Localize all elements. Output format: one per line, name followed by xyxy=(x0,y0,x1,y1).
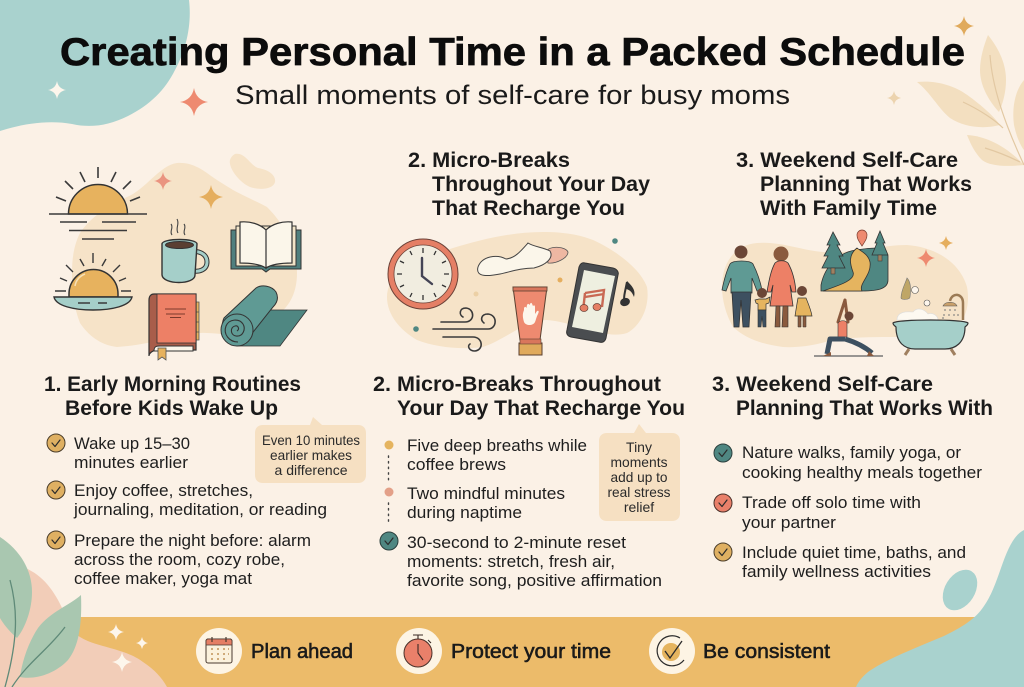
icon: sun over horizon xyxy=(49,167,147,239)
callout: tiny moments: add up to xyxy=(610,469,668,485)
heading: column 3 upper: With Family Time xyxy=(760,197,937,220)
bullet item 1 xyxy=(714,443,982,482)
illustration: morning routines xyxy=(49,154,307,360)
peach blob bottom left xyxy=(0,560,167,687)
bullet item 2: your partner xyxy=(742,513,836,532)
subtitle: Small moments of self-care for busy moms xyxy=(235,80,790,110)
icon: phone with music xyxy=(567,263,618,342)
illustration: micro-breaks xyxy=(387,232,648,355)
heading: column 3: Planning That Works With xyxy=(736,397,993,420)
callout: even 10 minutes: earlier makes xyxy=(270,447,352,463)
icon: yoga figure xyxy=(814,300,883,356)
heading: column 2 upper: 2. Micro-Breaks xyxy=(408,149,570,172)
leaves top right xyxy=(917,35,1024,166)
icon: music note xyxy=(619,281,635,307)
heading: column 1 xyxy=(44,373,301,420)
footer item: be consistent xyxy=(649,628,830,674)
heading: column 2: 2. Micro-Breaks Throughout xyxy=(373,373,661,396)
callout: tiny moments: real stress xyxy=(608,484,670,500)
white sparkles footer xyxy=(108,624,148,672)
icon: family xyxy=(722,246,812,327)
heading: column 2 upper: That Recharge You xyxy=(432,197,625,220)
callout: tiny moments: moments xyxy=(610,454,668,470)
bullet item 1: Nature walks, family yoga, or xyxy=(742,443,961,462)
icon: forest path xyxy=(821,230,888,291)
heading: column 3 upper: Planning That Works xyxy=(760,173,972,196)
icon: sun over water xyxy=(54,253,132,310)
bullet item 2: Two mindful minutes xyxy=(407,484,565,503)
bullet item 2 xyxy=(47,481,327,519)
callout: even 10 minutes xyxy=(255,417,366,483)
bullet item 1: minutes earlier xyxy=(74,453,188,472)
heading: column 3 upper xyxy=(736,149,972,220)
icon: coffee mug xyxy=(162,219,207,282)
list: micro-breaks xyxy=(380,436,662,590)
bullet item 2: Enjoy coffee, stretches, xyxy=(74,481,253,500)
list: early morning routines xyxy=(47,434,327,588)
bullet item 3: moments: stretch, fresh air, xyxy=(407,552,615,571)
bullet item 3: Include quiet time, baths, and xyxy=(742,543,966,562)
heading: column 2 upper: Throughout Your Day xyxy=(432,173,650,196)
bullet item 2 xyxy=(714,493,921,532)
footer item: be consistent: Be consistent xyxy=(703,641,830,663)
bullet item 3: Prepare the night before: alarm xyxy=(74,531,311,550)
bullet item 3: across the room, cozy robe, xyxy=(74,550,285,569)
icon: hand cream tube xyxy=(513,287,547,355)
footer item: protect your time: Protect your time xyxy=(451,641,611,663)
icon: lotion swipe xyxy=(478,243,568,276)
teal blob bottom right xyxy=(856,530,1024,687)
heading: column 3 upper: 3. Weekend Self-Care xyxy=(736,149,958,172)
heading: column 3 xyxy=(712,373,993,420)
bullet item 3: favorite song, positive affirmation xyxy=(407,571,662,590)
bullet item 3: family wellness activities xyxy=(742,562,931,581)
leaves bottom left xyxy=(0,537,81,687)
footer band xyxy=(0,617,1024,687)
bullet item 3 xyxy=(380,532,662,590)
icon: wind xyxy=(433,308,495,351)
callout: tiny moments: relief xyxy=(624,499,654,515)
callout: even 10 minutes: a difference xyxy=(274,462,348,478)
list: weekend self-care xyxy=(714,443,982,581)
teal blob small xyxy=(936,563,984,617)
bullet item 2: Trade off solo time with xyxy=(742,493,921,512)
bullet item 2: during naptime xyxy=(407,503,522,522)
callout: tiny moments: Tiny xyxy=(626,439,652,455)
footer item: plan ahead xyxy=(196,628,353,674)
bullet item 3 xyxy=(714,543,966,581)
bullet item 1: Wake up 15–30 xyxy=(74,434,190,453)
heading: column 1: Before Kids Wake Up xyxy=(65,397,278,420)
icon: wall clock xyxy=(388,239,458,309)
heading: column 2 xyxy=(373,373,685,420)
callout: tiny moments xyxy=(599,424,680,521)
bullet item 1 xyxy=(47,434,190,472)
bullet item 2: journaling, meditation, or reading xyxy=(73,500,327,519)
heading: column 2: Your Day That Recharge You xyxy=(397,397,685,420)
icon: journal xyxy=(149,294,199,360)
footer item: protect your time xyxy=(396,628,611,674)
bullet item 1: coffee brews xyxy=(407,455,506,474)
heading: column 1: 1. Early Morning Routines xyxy=(44,373,301,396)
bullet item 3 xyxy=(47,531,311,588)
heading: column 3: 3. Weekend Self-Care xyxy=(712,373,933,396)
title: Creating Personal Time in a Packed Schedule xyxy=(60,31,965,74)
teal blob top left xyxy=(0,0,190,131)
bullet item 1: cooking healthy meals together xyxy=(742,463,982,482)
illustration: weekend family xyxy=(722,230,968,356)
icon: yoga mat xyxy=(221,286,307,346)
footer item: plan ahead: Plan ahead xyxy=(251,641,353,663)
sparkles header xyxy=(48,16,974,116)
icon: open book xyxy=(231,222,301,272)
heading: column 2 upper xyxy=(408,149,650,220)
bullet item 2 xyxy=(384,484,565,522)
icon: bathtub xyxy=(893,278,968,355)
bullet item 3: coffee maker, yoga mat xyxy=(74,569,252,588)
callout: even 10 minutes: Even 10 minutes xyxy=(262,432,360,448)
bullet item 3: 30-second to 2-minute reset xyxy=(407,533,626,552)
bullet item 1 xyxy=(384,436,587,474)
bullet item 1: Five deep breaths while xyxy=(407,436,587,455)
